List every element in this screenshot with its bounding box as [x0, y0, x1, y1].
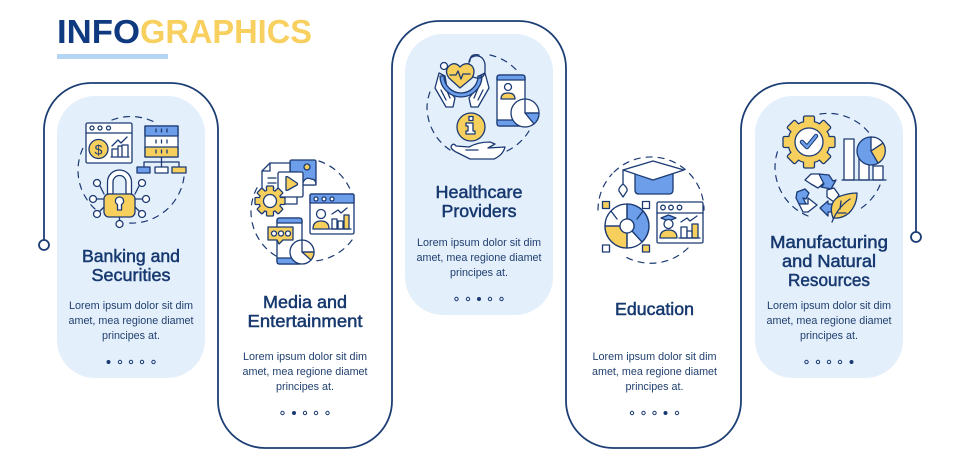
heading: Manufacturing [770, 232, 888, 252]
pagination dots [281, 411, 329, 415]
pagination dots [630, 411, 679, 415]
body text: principes at. [626, 381, 684, 393]
body text: Lorem ipsum dolor sit dim [417, 237, 541, 249]
title: GRAPHICS [140, 13, 312, 50]
heading: Resources [788, 270, 870, 290]
body text [68, 300, 194, 342]
icon: education [598, 157, 704, 263]
title underline [57, 54, 168, 59]
body text: principes at. [102, 330, 160, 342]
body text: Lorem ipsum dolor sit dim [243, 351, 367, 363]
body text [242, 351, 368, 393]
heading: Entertainment [248, 311, 363, 331]
title [57, 13, 312, 50]
pagination dots [805, 360, 854, 364]
heading [248, 292, 363, 331]
body text: amet, mea regione diamet [242, 366, 368, 378]
icon: banking: $ [95, 142, 103, 158]
icon: media [251, 160, 354, 264]
title: INFO [57, 13, 140, 50]
panel: education [592, 157, 718, 415]
body text: Lorem ipsum dolor sit dim [767, 300, 891, 312]
body text: amet, mea regione diamet [68, 315, 194, 327]
panel: manufacturing and natural resources [755, 96, 903, 378]
body text [416, 237, 542, 279]
panel: banking and securities [57, 96, 205, 378]
body text: Lorem ipsum dolor sit dim [69, 300, 193, 312]
pagination dots [106, 360, 155, 364]
body text: amet, mea regione diamet [766, 315, 892, 327]
heading: Healthcare [436, 182, 522, 202]
heading: Providers [442, 201, 517, 221]
body text: principes at. [800, 330, 858, 342]
icon: healthcare [427, 55, 539, 159]
heading [436, 182, 522, 221]
heading: Securities [92, 265, 171, 285]
pagination dots [455, 297, 503, 301]
body text [766, 300, 892, 342]
heading: Media and [263, 292, 347, 312]
panel: media and entertainment [242, 160, 368, 415]
body text: amet, mea regione diamet [416, 252, 542, 264]
body text: principes at. [276, 381, 334, 393]
heading: and Natural [782, 251, 876, 271]
icon: banking [78, 117, 186, 228]
icon: manufacturing [775, 113, 886, 222]
body text [592, 351, 718, 393]
panel: healthcare providers [405, 34, 553, 315]
body text: amet, mea regione diamet [592, 366, 718, 378]
heading: Banking and [82, 246, 180, 266]
heading [82, 246, 180, 285]
body text: principes at. [450, 267, 508, 279]
heading: Education [615, 299, 694, 319]
body text: Lorem ipsum dolor sit dim [592, 351, 716, 363]
heading [770, 232, 888, 290]
